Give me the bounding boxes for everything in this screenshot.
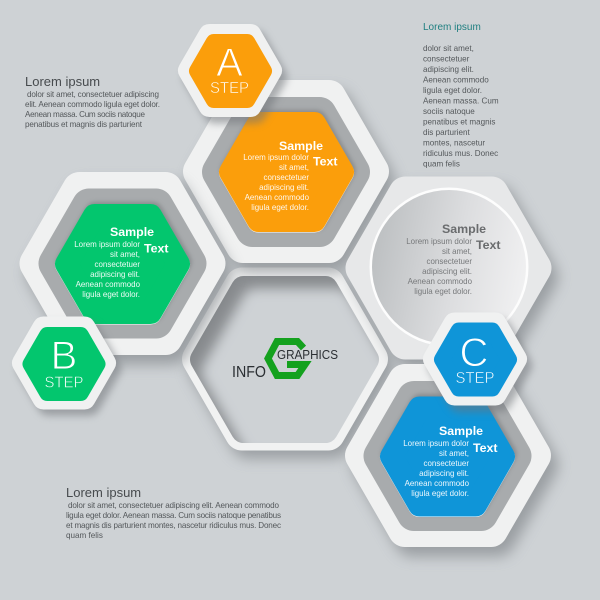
badge: step B: STEP [44,374,84,392]
text block: top left: dolor sit amet, consectetuer adipiscing [27,90,159,99]
text: blue panel: consectetuer [424,459,469,468]
text block: top right: dis parturient [423,128,471,137]
text block: top left [25,74,160,129]
text block: top right [423,22,499,168]
text: green panel: consectetuer [95,260,140,269]
panel: center hexagon [182,268,398,466]
text: grey panel: Aenean commodo [408,277,473,286]
text: blue panel: Aenean commodo [405,479,470,488]
text: green panel: Text [144,242,169,256]
text block: bottom left: Lorem ipsum [66,485,141,500]
text: grey panel: sit amet, [442,247,472,256]
text: blue panel: sit amet, [439,449,469,458]
text: grey panel [406,222,501,296]
text block: top right: quam felis [423,160,460,168]
text: green panel: adipiscing elit. [90,270,140,279]
text block: top right: ridiculus mus. Donec [423,149,498,158]
text block: bottom left: quam felis [66,531,103,540]
text: orange panel: Text [313,154,338,168]
text: orange panel: sit amet, [279,163,309,172]
text: blue panel: adipiscing elit. [419,469,469,478]
logo: infographics: GRAPHICS [277,347,338,362]
text block: bottom left: et magnis dis parturient montes, nascetur ridiculus mus. Donec [66,521,281,530]
text: orange panel [243,139,338,212]
text block: top right: montes, nascetur [423,138,485,148]
text block: top right: Lorem ipsum [423,22,481,33]
text block: top left: penatibus et magnis dis parturient [25,120,143,129]
panel: orange hexagon [200,97,378,256]
text: orange panel: Sample [279,139,323,153]
panel: grey hexagon with disc [362,188,541,352]
text: green panel: Aenean commodo [76,280,141,289]
text block: bottom left [66,485,281,540]
text block: top right: consectetuer [423,54,470,64]
text: green panel [74,225,169,299]
text block: top left: elit. Aenean commodo ligula eget dolor. [25,100,160,109]
badge: step A: A [216,41,243,85]
text: grey panel: Text [476,238,501,252]
logo: infographics: INFO [232,364,266,381]
text: green panel: ligula eget dolor. [82,290,140,299]
text: blue panel [403,424,498,498]
text block: top right: sociis natoque [423,107,475,116]
text block: top left: Lorem ipsum [25,74,100,89]
text: blue panel: Text [473,441,498,455]
text: grey panel: adipiscing elit. [422,267,472,276]
text: orange panel: ligula eget dolor. [251,203,309,212]
text: orange panel: Aenean commodo [245,193,310,202]
panel: blue hexagon [362,381,541,540]
text block: top right: Aenean commodo [423,76,489,84]
panel: green hexagon [36,189,215,348]
badge: step A [189,35,276,112]
text: blue panel: ligula eget dolor. [411,489,469,498]
badge: step A: STEP [210,80,249,97]
text: grey panel: Lorem ipsum dolor [406,237,472,246]
text: grey panel: consectetuer [427,257,472,266]
text: orange panel: Lorem ipsum dolor [243,153,309,162]
text: grey panel: ligula eget dolor. [414,287,472,296]
text: blue panel: Lorem ipsum dolor [403,439,469,448]
text block: top right: adipiscing elit. [423,65,474,74]
badge: step B [23,328,110,404]
text: blue panel: Sample [439,424,483,438]
text block: top right: dolor sit amet, [423,44,474,53]
text block: top left: Aenean massa. Cum sociis natoque [25,110,145,119]
badge: step C: STEP [456,370,494,387]
text block: top right: ligula eget dolor. [423,86,482,95]
icon: green G [268,342,305,376]
text block: bottom left: ligula eget dolor. Aenean massa. Cum sociis natoque penatibus [66,511,281,520]
text block: top right: penatibus et magnis [423,118,495,126]
text: green panel: Sample [110,225,154,239]
text: green panel: sit amet, [110,250,140,259]
badge: step B: B [51,334,77,378]
text block: bottom left: dolor sit amet, consectetuer adipiscing elit. Aenean commodo [68,501,279,510]
text: green panel: Lorem ipsum dolor [74,240,140,249]
badge: step C: C [460,331,488,375]
text: orange panel: adipiscing elit. [259,183,309,192]
text: orange panel: consectetuer [264,173,309,182]
logo: infographics [232,342,338,381]
text block: top right: Aenean massa. Cum [423,96,499,106]
text: grey panel: Sample [442,222,486,236]
badge: step C [434,324,521,401]
